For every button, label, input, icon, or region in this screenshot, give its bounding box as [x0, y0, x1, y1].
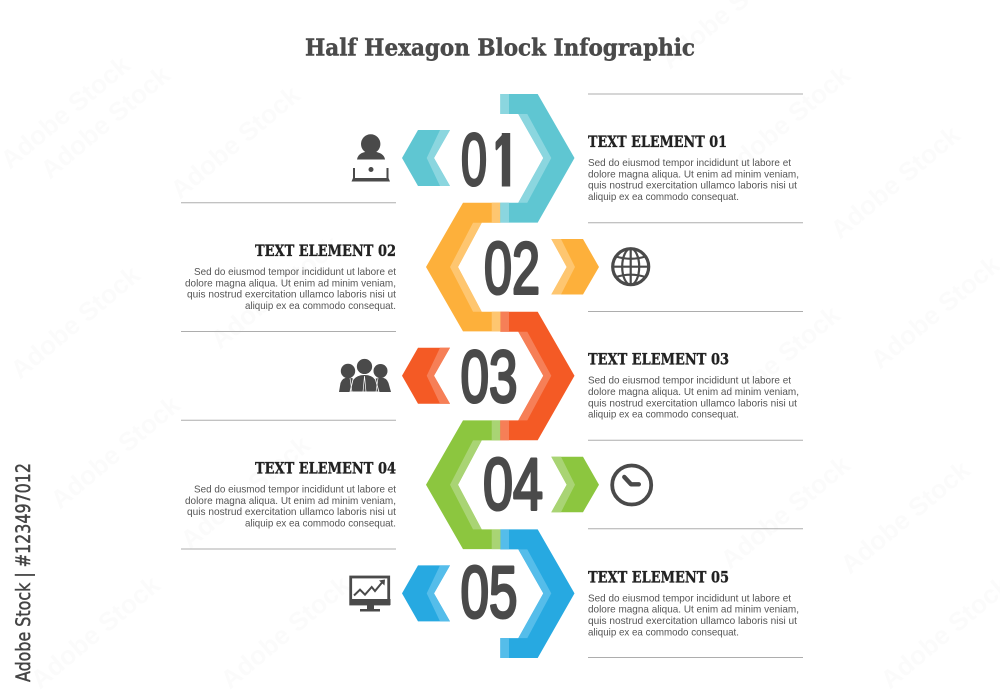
number 05: 05 — [460, 552, 518, 634]
text block 02: quis nostrud exercitation ullamco laboris nisi ut — [187, 290, 396, 301]
text block 04: dolore magna aliqua. Ut enim ad minim veniam, — [185, 496, 396, 507]
text block 01 — [588, 94, 803, 223]
text block 04: Sed do eiusmod tempor incididunt ut labore et — [194, 484, 396, 496]
text block 01: quis nostrud exercitation ullamco laboris nisi ut — [588, 181, 797, 192]
left chevron 05 — [402, 565, 450, 621]
text block 04: TEXT ELEMENT 04 — [255, 458, 396, 478]
half hexagon 02 — [426, 203, 500, 331]
text block 05: aliquip ex ea commodo consequat. — [588, 627, 739, 638]
text block 01: aliquip ex ea commodo consequat. — [588, 192, 739, 203]
left chevron 01 — [402, 130, 450, 186]
text block 02: Sed do eiusmod tempor incididunt ut labore et — [194, 267, 396, 278]
right chevron 04 — [551, 457, 599, 512]
text block 02: TEXT ELEMENT 02 — [255, 241, 396, 260]
text block 01: dolore magna aliqua. Ut enim ad minim veniam, — [588, 169, 799, 180]
text block 01: Sed do eiusmod tempor incididunt ut labore et — [588, 158, 791, 169]
number 01 — [462, 132, 510, 187]
text block 05 — [588, 529, 803, 658]
icon: monitor with rising chart — [350, 577, 390, 612]
number 01: 0 — [461, 120, 487, 201]
text block 05: Sed do eiusmod tempor incididunt ut labore et — [588, 593, 791, 604]
text block 05: TEXT ELEMENT 05 — [588, 567, 729, 586]
text block 04: quis nostrud exercitation ullamco laboris nisi ut — [187, 507, 396, 518]
text block 03: quis nostrud exercitation ullamco laboris nisi ut — [588, 398, 797, 409]
number 01: 1 — [492, 120, 518, 201]
text block 04 — [181, 420, 396, 549]
text block 02: dolore magna aliqua. Ut enim ad minim veniam, — [185, 278, 396, 289]
left chevron 03 — [402, 348, 450, 404]
icon: globe — [613, 249, 649, 285]
text block 03: TEXT ELEMENT 03 — [588, 350, 729, 369]
text block 05: quis nostrud exercitation ullamco laboris nisi ut — [588, 616, 797, 627]
text block 03: dolore magna aliqua. Ut enim ad minim veniam, — [588, 387, 799, 398]
text block 01: TEXT ELEMENT 01 — [588, 132, 727, 151]
step 02 block: orange — [426, 203, 599, 331]
half hexagon 05 — [500, 529, 574, 658]
step 04 block: green — [426, 420, 599, 549]
icon: clock — [612, 466, 651, 504]
step 03 block: red-orange — [402, 312, 574, 440]
text block 05: dolore magna aliqua. Ut enim ad minim veniam, — [588, 605, 799, 616]
number 03: 03 — [460, 337, 518, 418]
half hexagon 03 — [500, 312, 574, 440]
text block 03: Sed do eiusmod tempor incididunt ut labore et — [588, 376, 791, 387]
text block 04: aliquip ex ea commodo consequat. — [245, 518, 396, 529]
number 04: 04 — [483, 444, 543, 526]
step 01 block: teal — [402, 94, 574, 223]
text block 03: aliquip ex ea commodo consequat. — [588, 410, 739, 421]
half hexagon 01 — [500, 94, 574, 223]
half hexagon 04 — [426, 420, 500, 549]
icon: team of people — [339, 358, 391, 392]
icon: person at laptop — [352, 134, 390, 182]
text block 02 — [181, 203, 396, 332]
text block 02: aliquip ex ea commodo consequat. — [245, 301, 396, 312]
text block 03 — [588, 312, 803, 440]
right chevron 02 — [551, 239, 599, 294]
step 05 block: blue — [402, 529, 574, 658]
number 02: 02 — [484, 228, 540, 310]
source credit: Adobe Stock | #123497012 — [12, 463, 35, 682]
title: Half Hexagon Block Infographic — [305, 34, 695, 62]
